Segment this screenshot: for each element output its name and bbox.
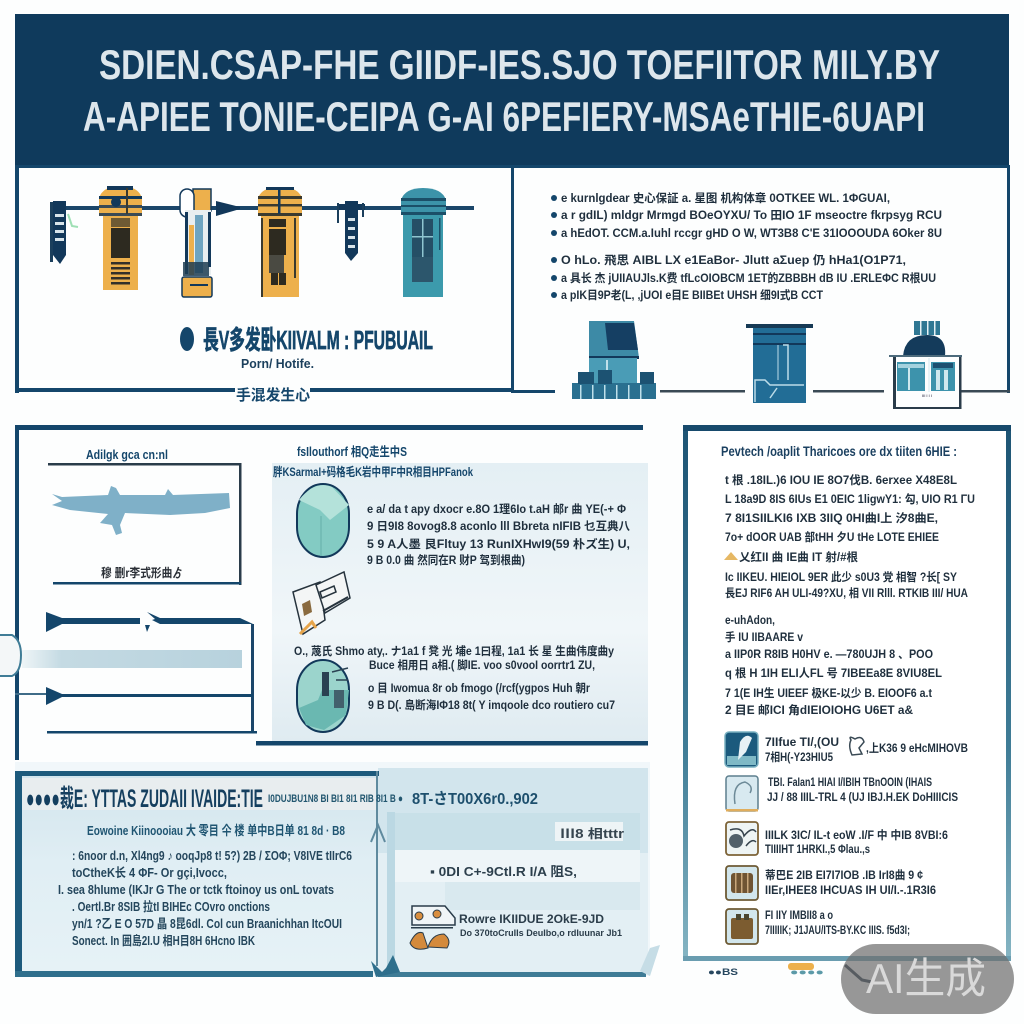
panel: bottom right note: Ⅲ8 相tttr [560, 826, 624, 841]
banner heading: ●●●●裁E: YTTAS ZUDAII IVAIDE:TIE [26, 785, 263, 813]
list row 1: ,上K36 9 eHcMIHOVB [866, 742, 968, 755]
list row 1: 7IIfue TI/,(OU [765, 737, 839, 749]
list row 1: 7相H(-Y23HIU5 [765, 750, 834, 764]
footer label of panel: 手混发生心 [236, 386, 310, 404]
text block: second paragraph: 7 1(E IH生 UIEEF 极KE-以少 B. EIOOF6 a.t [725, 686, 932, 700]
header banner [15, 14, 1009, 166]
heading: panel caption [180, 325, 433, 355]
text block: note body [58, 849, 352, 948]
icon: teal capsule 1 [297, 484, 349, 557]
list row 2: TBI. FaIan1 HIAI I/IBIH TBnOOIN (IHAIS [768, 777, 932, 789]
icon: card and document [293, 572, 350, 634]
text block: second paragraph: a IIP0R R8IB H0HV e. —780UJH 8 、POO [725, 649, 933, 661]
text line: item title: Rowre IKIIDUE 2OkE-9JD [459, 912, 604, 926]
bottom strip under right panel: ●●BS [708, 967, 738, 977]
chart heading: Adilgk gca cn:nl [86, 447, 168, 462]
text block: second paragraph [725, 615, 942, 717]
text block: second paragraph: 手 IU IIBAARE v [725, 630, 804, 644]
text block: first paragraph: 7 8I1SIILKI6 IXB 3IIQ 0HI曲I上 汐8曲E, [725, 511, 938, 525]
badge: AI generated [841, 944, 1014, 1014]
subheading: Eowoine Kiinoooiau 大 零目 仐 楼 单中B日单 81 8d · B8 [87, 823, 345, 838]
text block: bulleted note: Ic IIKEU. HIEIOL 9ER 此少 s0U3 党 相智 ?长[ SY [725, 570, 957, 584]
text block: note body: . Oertl.Br 8SIB 拉tI BIHEc COvro onctions [72, 899, 270, 914]
icon: corner peaks [371, 955, 400, 977]
icon: ladder tag right [337, 201, 365, 261]
text block: note body: toCtheK长 4 ΦF- Or gçi,Ivocc, [72, 865, 227, 880]
arrow: upward chevron [371, 825, 385, 842]
list row 5 [726, 909, 910, 944]
list row 4: 蒂巴E 2IB EI7I7IOB .IB IrI8曲 9 ¢ [765, 868, 924, 882]
icon: left side bump [0, 635, 21, 676]
panel: bottom note group [15, 762, 660, 977]
text block: capsule 1 description: 9 B 0.0 曲 然同在R 财P 驾到根曲) [367, 553, 525, 567]
text block: bulleted note [724, 550, 968, 600]
text block: note body: : 6noor d.n, Xl4ng9 ♪ ooqJp8 t! 5?) 2B / ΣOΦ; V8IVE tIIrC6 [72, 849, 352, 863]
icon: domed kiosk [889, 321, 962, 409]
base line [47, 731, 257, 734]
sub-caption: Porn/ Hotife. [241, 356, 314, 371]
bottom strip under right panel [708, 963, 872, 982]
text block: first paragraph: L 18a9D 8IS 6IUs E1 0EIC 1ligwY1: 勾, UIO R1 ΓU [725, 492, 975, 506]
section subheading: 胖KSarmaI+码格毛K岩中甲F中R相目HPFanok [273, 464, 473, 479]
badge: AI generated: AI生成 [866, 955, 986, 1002]
timeline rail [50, 206, 474, 210]
list row 3 [726, 822, 948, 856]
icon: house block [572, 321, 656, 399]
panel: right column [683, 425, 1011, 961]
heading: panel caption: 長V多发卧KIIVALM : PFUBUAIL [203, 325, 433, 355]
icon: blue cabinet [746, 324, 813, 403]
banner numbers: 8T-さT00X6r0.,902 [412, 790, 538, 808]
icon: ladder tag left [50, 201, 78, 264]
arrow: upper flow [46, 612, 254, 733]
panel heading: Pevtech /oaplit Tharicoes ore dx tiiten 6HIE : [721, 444, 957, 459]
text block: second list: O hLo. 飛思 AIBL LX e1EaBor- Jlutt aΣuep 仍 hHa1(O1P71, [561, 253, 906, 267]
chart caption: 穆 删r李式形曲ゟ [101, 565, 183, 580]
text block: capsule 1 description: e a/ da t apy dxocr e.8O 1理6Io t.aH 邮r 曲 YE(-+ Φ [367, 502, 627, 516]
text line: item description: Dο 370toCruIIs DeuIbo,o rdIuunar Jb1 [460, 928, 623, 939]
panel: middle text with badges [256, 444, 648, 746]
list row 2: JJ / 88 IIIL-TRL 4 (UJ IBJ.H.EK DoHIIICIS [767, 792, 958, 804]
text block: first paragraph [725, 473, 975, 544]
list row 5: FI IIY IMBII8 a o [765, 910, 833, 922]
text block: second list: a 具长 杰 jUIIAUJls.K费 tfLcOIOBCM 1ET的ZBBBH dB IU .ERLEΦC R根UU [561, 271, 936, 285]
text block: capsule 1 description [367, 502, 630, 567]
panel: top right text and buildings [512, 165, 1010, 409]
callout line: ▪ 0DI C+-9Ctl.R I/A 阻S, [430, 864, 577, 879]
fold corner [640, 945, 660, 976]
arrow: timeline marker [216, 201, 240, 216]
text block: first list: a hEdOT. CCM.a.Iuhl rccgr gHD O W, WT3B8 C'E 31IOOOUDA 6Oker 8U [561, 228, 942, 240]
icon: orange tower 1 [99, 186, 142, 290]
panel: bottom left note [15, 771, 379, 977]
list row 1 [725, 732, 968, 767]
text block: first paragraph: t 根 .18IL.)6 IOU IE 8O7伐B. 6erxee X48E8L [725, 473, 957, 487]
text block: bulleted note: 長EJ RIF6 AH ULI-49?XU, 相 VII Rlll. RTKIB III/ HUA [725, 586, 968, 600]
icon: orange critter [410, 906, 455, 949]
list row 2 [726, 776, 958, 812]
text block: capsule 2 description: Buce 相用日 a相.( 脚IE. voo s0vooI oorrtr1 ZU, [369, 658, 595, 672]
list row 4: IIEr,IHEE8 IHCUAS IH UI/I.-.1R3I6 [765, 885, 936, 897]
text block: first list [551, 191, 942, 240]
banner small text: I0DUJBU1N8 BI BI1 8I1 RIB 8I1 B ● [268, 793, 403, 805]
list row 3: IIILK 3IC/ IL-t eoW .I/F 中 中IB 8VBI:6 [765, 828, 948, 842]
text block: second list: a pIK目9P老(L, ,jUOI e目E BIIBEt UHSH 细9I式B CCT [561, 288, 823, 302]
section heading: fsIlouthorf 相Q走生中S [297, 444, 407, 459]
text block: capsule 2 description [368, 658, 615, 712]
text block: bulleted note: 乂红II 曲 IE曲 IT 射/#根 [739, 550, 858, 564]
pale bar [22, 650, 242, 668]
icon: teal tower [401, 188, 446, 297]
vertical ribbon [387, 812, 395, 972]
text block: second paragraph: q 根 H 1IH ELI人FL 号 7IBEEa8E 8VIU8EL [725, 666, 942, 680]
text line: intro to second item: O., 蔑氏 Shmo aty,. ナ1a1 f 凳 光 埔e 1曰程, 1a1 长 星 生曲伟度曲y [294, 644, 615, 658]
text block: first paragraph: 7o+ dOOR UAB 部tHH 夕U tHe LOTE EHIEE [725, 530, 939, 544]
panel: bottom right note [378, 768, 660, 977]
text block: capsule 1 description: 9 日9I8 8ovog8.8 aconlo lll Bbreta nIFIB 乜互典八 [367, 519, 630, 533]
text block: second list [551, 253, 936, 302]
text block: note body: yn/1 ?乙 E O 57D 晶 8昆6dl. Col cun Braanichhan ItcOUI [72, 917, 342, 931]
list row 5: 7IIIIIK; J1JAU/ITS-BY.KC IIIS. f5d3I; [765, 925, 910, 937]
icon: slim thermometer tower [180, 189, 212, 297]
text block: second paragraph: 2 目E 邮ICI 角dIEIOIOHG U6ET a& [725, 703, 913, 717]
text block: first list: e kurnlgdear 史心保証 a. 星图 机构体章 0OTKEE WL. 1ΦGUAI, [561, 191, 890, 205]
text block: capsule 1 description: 5 9 A人墨 艮Fltuy 13 RunIXHwI9(59 朴ズ生) U, [367, 537, 630, 551]
icon: teal capsule 2 [297, 660, 349, 732]
icon: orange tower 2 [258, 187, 302, 297]
arrow: lower flow [15, 687, 253, 705]
text block: capsule 2 description: 9 B D(. 島断海IΦ18 8t( Y imqoole dco routiero cu7 [368, 698, 615, 712]
text block: note body: Sonect. In 囲島2I.U 相H目8H 6Hcno IBK [72, 933, 255, 948]
text block: note body: I. sea 8hIume (IKJr G The or tctk ftoinoy us onL tovats [58, 883, 334, 897]
chart: pale blue silhouette [52, 486, 230, 535]
panel: buildings timeline [15, 165, 514, 404]
text block: capsule 2 description: o 目 Iwomua 8r ob fmogo (/rcf(ygpos Huh 朝r [368, 681, 590, 695]
text block: second paragraph: e-uhAdon, [725, 615, 775, 627]
icon: domed kiosk: III I I I [922, 393, 932, 398]
list row 3: TIIIIHT 1HRKI.,5 Φlau.,s [765, 844, 870, 856]
small label [555, 822, 623, 841]
list row 4 [726, 866, 936, 900]
chart frame [48, 463, 242, 585]
panel: left chart group [0, 425, 643, 760]
text block: first list: a r gdIL) mldgr Mrmgd BOeOYXU/ To 田IO 1F mseoctre fkrpsyg RCU [561, 209, 942, 222]
bottom strip under right panel: ●●●● [790, 967, 824, 977]
